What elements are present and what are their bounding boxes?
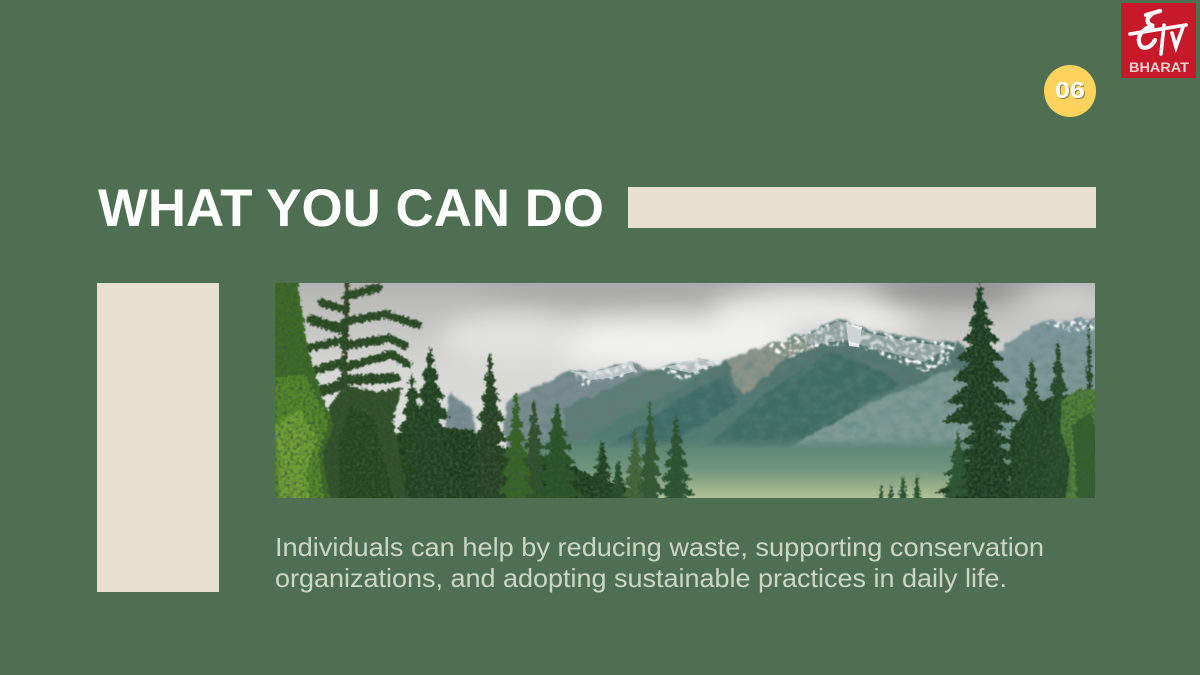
tall pine with spreading branches [308,283,418,510]
title: WHAT YOU CAN DO [98,179,604,238]
body text: organizations, and adopting sustainable practices in daily life. [275,563,1007,593]
mid forest trees [395,346,696,498]
body text: Individuals can help by reducing waste, supporting conservation [275,532,1044,562]
snow patch and snowy ridges [570,321,950,380]
small valley trees [877,474,923,498]
large fir on the right [934,283,1019,498]
side accent panel [97,283,219,592]
right tree cluster [1007,324,1095,498]
dark forest floor [590,476,642,498]
valley [520,438,1020,498]
sky and clouds [296,283,1095,458]
page number badge: 06 [1056,78,1086,104]
snow caps [570,319,1095,390]
title accent bar [628,187,1096,228]
body text [275,532,1044,593]
left bright spruce [275,283,334,498]
logo: ETV Bharat [1121,3,1196,78]
logo: ETV Bharat: BHARAT [1129,60,1190,75]
page number badge: 06 [1055,77,1085,103]
far mountains [444,316,1095,448]
photo: forest and snow-capped mountains [275,283,1095,498]
page number badge [1044,65,1096,117]
